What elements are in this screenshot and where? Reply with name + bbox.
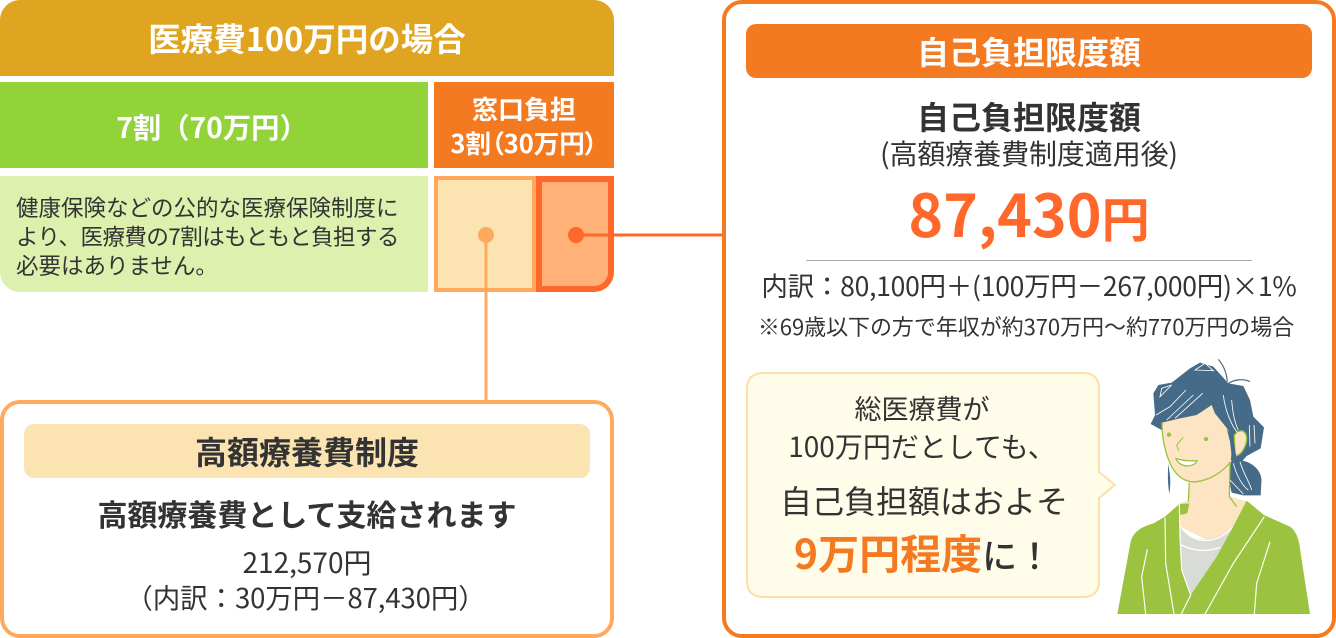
- stray hairs: [1218, 359, 1250, 383]
- neck and chest: [1179, 462, 1247, 543]
- panel: dark orange cell: [536, 176, 614, 292]
- text: 注記: ※69歳以下の方で年収が約370万円～約770万円の場合: [758, 310, 1294, 342]
- speech bubble: [746, 372, 1116, 598]
- inner shirt: [1179, 525, 1234, 595]
- panel: header 医療費100万円の場合: [0, 0, 614, 76]
- ear: [1234, 431, 1246, 456]
- jaw line: [1162, 423, 1237, 507]
- panel: light orange cell: [434, 176, 536, 292]
- text: 内訳計算式: 内訳：80,100円＋(100万円－267,000円)×1%: [761, 265, 1297, 304]
- text: 高額療養費として支給されます: 高額療養費として支給されます: [97, 490, 517, 534]
- heading: 高額療養費制度: [24, 424, 590, 478]
- bubble text: 9万円程度に！: 9万円程度に！: [794, 521, 1052, 581]
- panel: 自己負担限度額: [722, 0, 1336, 638]
- number: 87,430円: 87,430円: [908, 169, 1150, 254]
- side hair strand: [1227, 428, 1237, 459]
- panel: 7割 green header: 7割（70万円）: [116, 106, 308, 147]
- connector: light orange dot and line to 高額療養費制度: [478, 227, 494, 400]
- icon: woman in green cardigan: [1117, 359, 1310, 614]
- panel: 窓口負担 orange header: [434, 82, 614, 168]
- hair highlights: [1156, 363, 1255, 494]
- mouth: [1176, 459, 1197, 466]
- label: 窓口負担: 窓口負担: [472, 90, 576, 127]
- bubble text: 総医療費が: 総医療費が: [854, 388, 990, 427]
- cardigan lines: [1142, 504, 1270, 614]
- face: [1162, 405, 1233, 482]
- heading: 自己負担限度額 banner: 自己負担限度額: [917, 28, 1141, 74]
- connector: dark orange dot and line to 自己負担限度額: [568, 227, 722, 243]
- heading: 自己負担限度額 banner: [746, 24, 1312, 78]
- text: 内訳: （内訳：30万円－87,430円）: [125, 576, 486, 616]
- text: 高額療養費制度適用後: (高額療養費制度適用後): [880, 133, 1178, 173]
- hair back: [1151, 363, 1264, 462]
- text: 212,570円: 212,570円: [242, 542, 372, 582]
- cardigan: [1117, 501, 1310, 614]
- left hair strand: [1168, 463, 1170, 494]
- panel: header 医療費100万円の場合: 医療費100万円の場合: [148, 14, 466, 61]
- bubble text: 100万円だとしても、: 100万円だとしても、: [788, 426, 1056, 466]
- panel: green explanation text: [0, 176, 428, 292]
- label: 3割（30万円）: 3割（30万円）: [450, 124, 598, 160]
- panel: 7割 green header: [0, 82, 428, 168]
- divider: [806, 260, 1252, 261]
- panel: green explanation text: 必要はありません。: [16, 249, 218, 281]
- bubble text: 自己負担額はおよそ: 自己負担額はおよそ: [780, 477, 1068, 523]
- panel: 高額療養費制度: [0, 400, 614, 638]
- panel: green explanation text: より、医療費の7割はもともと負担する: [16, 220, 399, 252]
- heading: 高額療養費制度: 高額療養費制度: [195, 428, 419, 474]
- panel: green explanation text: 健康保険などの公的な医療保険制度に: [16, 191, 399, 223]
- text: 自己負担限度額: 自己負担限度額: [917, 92, 1141, 138]
- eyes and nose: [1167, 432, 1171, 437]
- hair bun: [1230, 460, 1262, 495]
